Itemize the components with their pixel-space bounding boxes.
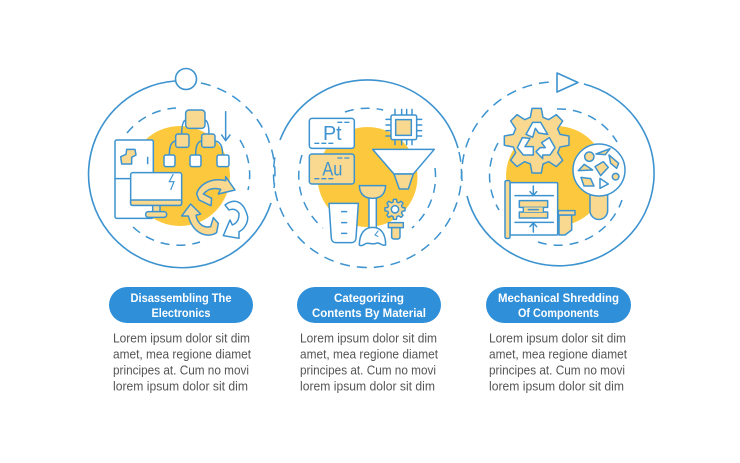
text block: step 2 description	[300, 330, 438, 394]
inner dashed ring	[490, 109, 622, 245]
text block: step 3 description: amet, mea regione diamet	[489, 346, 627, 362]
heading pill: categorizing contents by material: Categorizing	[334, 292, 404, 305]
icon: fridge	[115, 140, 153, 218]
text block: step 2 description: Lorem ipsum dolor sit dim	[300, 330, 437, 346]
text block: step 2 description: lorem ipsum dolor sit dim	[300, 378, 435, 394]
text block: step 1 description	[113, 330, 251, 394]
inner dashed ring	[299, 108, 436, 228]
icon: microchip	[386, 109, 422, 145]
text block: step 3 description: principes at. Cum no movi	[489, 362, 625, 378]
icon: gear, magnifier, shredder	[504, 108, 625, 238]
inner dashed ring	[127, 108, 250, 245]
icon: magnifier with fragments	[573, 144, 625, 219]
icon: materials, chip, funnel, beaker, blender	[309, 109, 434, 246]
icon: recycling gear	[504, 108, 569, 173]
outer ring step 2	[274, 80, 462, 268]
text block: step 1 description: Lorem ipsum dolor sit dim	[113, 330, 250, 346]
yellow backdrop circle	[130, 126, 230, 226]
panel: disassembling the electronics	[89, 68, 275, 394]
icon: beaker	[329, 203, 358, 243]
outer ring step 3	[462, 82, 654, 266]
icon: hierarchy tree	[164, 110, 229, 167]
text block: step 3 description: lorem ipsum dolor sit dim	[489, 378, 624, 394]
text block: step 1 description: principes at. Cum no movi	[113, 362, 249, 378]
icon: funnel	[373, 149, 434, 189]
heading pill: mechanical shredding of components	[486, 287, 631, 323]
heading pill: categorizing contents by material: Contents By Material	[312, 307, 426, 320]
text block: step 1 description: lorem ipsum dolor sit dim	[113, 378, 248, 394]
icon: bin	[558, 211, 575, 235]
text block: step 2 description: principes at. Cum no movi	[300, 362, 436, 378]
outer ring step 1	[89, 81, 275, 268]
heading pill: mechanical shredding of components: Of Components	[518, 307, 599, 320]
icon: fridge, monitor, hierarchy and recycling arrows	[115, 110, 248, 238]
text block: step 3 description	[489, 330, 627, 394]
text block: step 3 description: Lorem ipsum dolor sit dim	[489, 330, 626, 346]
text block: step 2 description: amet, mea regione diamet	[300, 346, 438, 362]
icon: blender tool	[359, 186, 386, 246]
icon: recycling arrows	[182, 177, 248, 238]
heading pill: mechanical shredding of components: Mechanical Shredding	[498, 292, 619, 305]
panel: mechanical shredding of components	[462, 73, 654, 394]
yellow backdrop circle	[318, 127, 418, 227]
heading pill: categorizing contents by material	[297, 287, 441, 323]
panel: categorizing contents by material	[274, 80, 462, 394]
icon: broken monitor	[131, 173, 182, 217]
icon: small gear and bolt	[385, 199, 405, 239]
yellow backdrop circle	[506, 126, 606, 226]
heading pill: disassembling the electronics: Disassembling The	[130, 292, 232, 305]
text block: step 1 description: amet, mea regione diamet	[113, 346, 251, 362]
arrow: down	[222, 112, 230, 141]
step marker circle	[176, 68, 196, 90]
icon: shredder press	[505, 181, 558, 238]
icon: Au label: Au	[322, 160, 342, 181]
icon: Pt label: Pt	[323, 123, 342, 145]
icon: play triangle marker	[557, 73, 578, 92]
heading pill: disassembling the electronics	[109, 287, 253, 323]
heading pill: disassembling the electronics: Electronics	[152, 307, 210, 320]
